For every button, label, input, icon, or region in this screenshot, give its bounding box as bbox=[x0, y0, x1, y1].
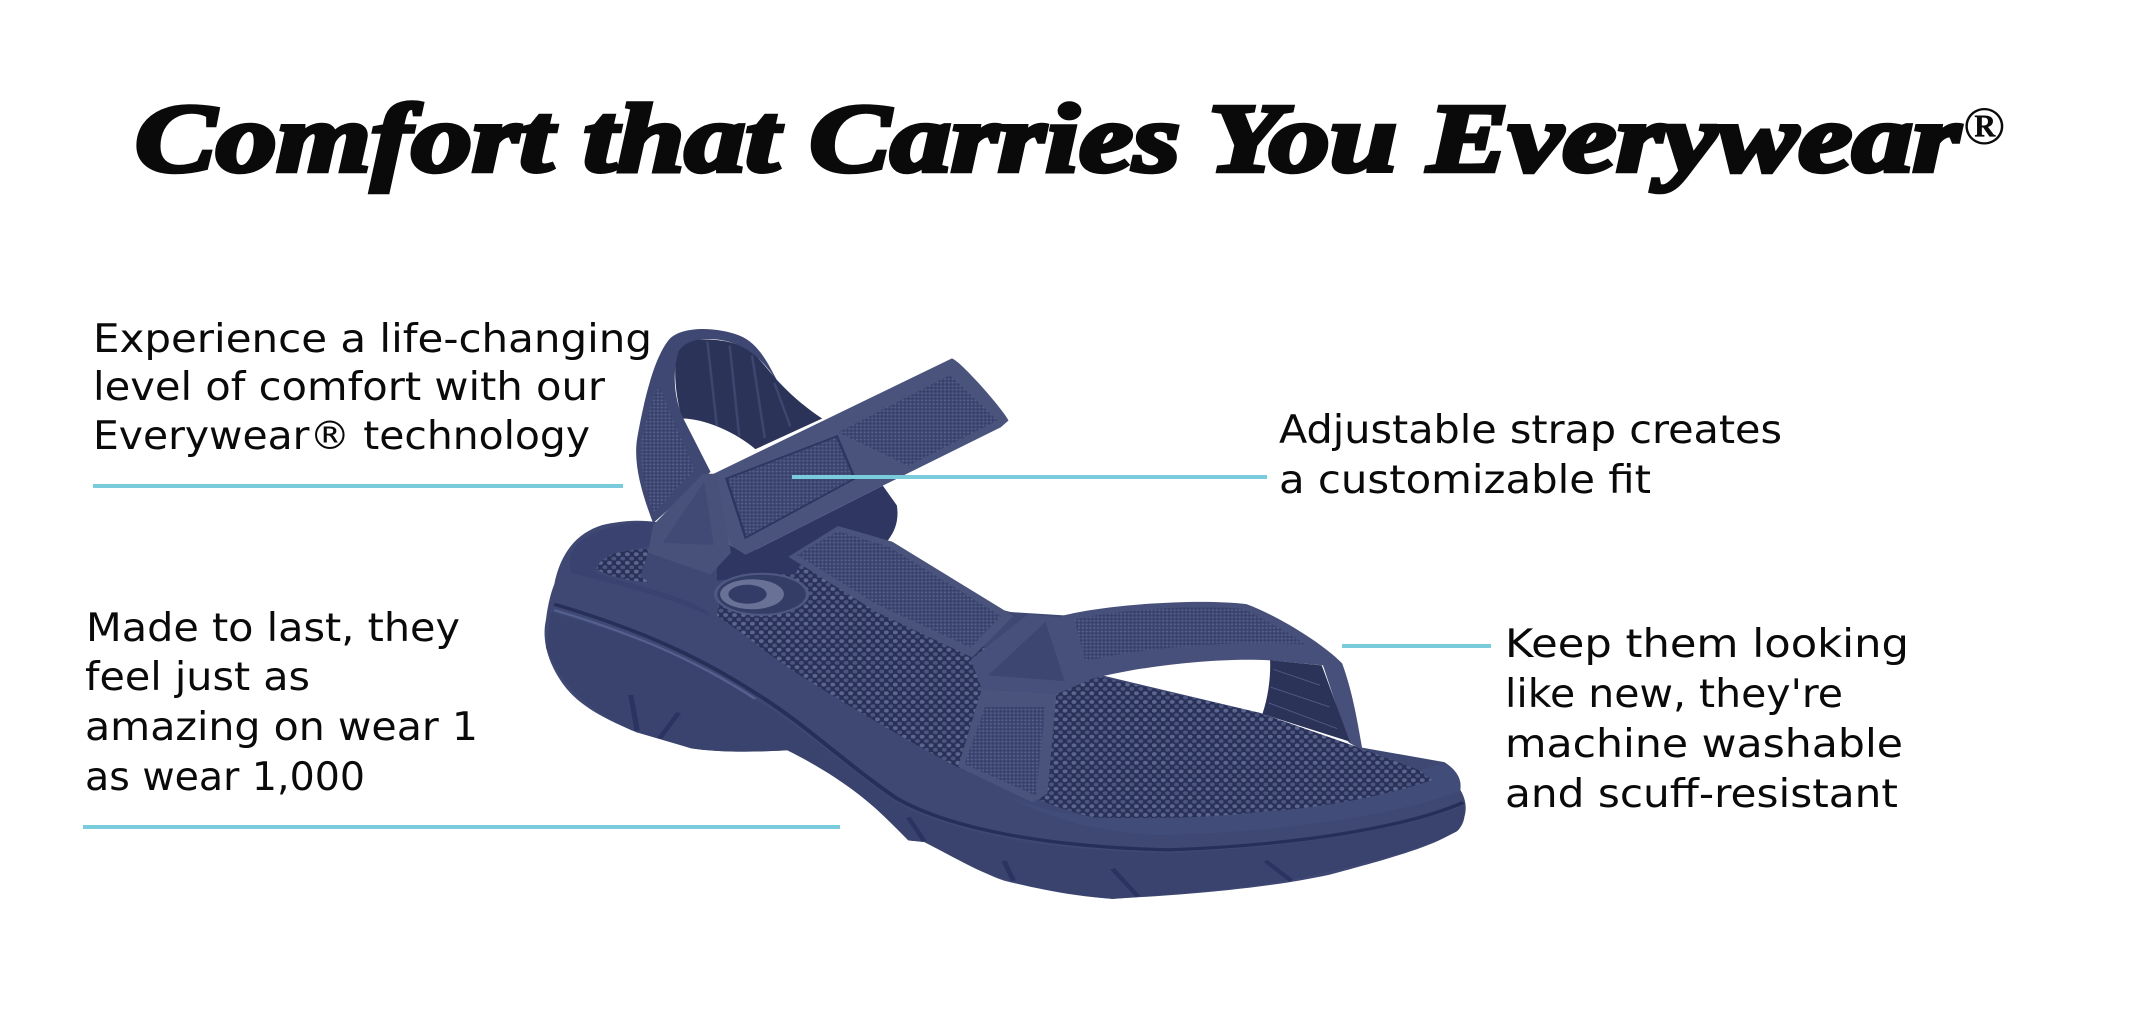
lower strap bbox=[958, 689, 1056, 802]
text: machine washable: Keep them looking bbox=[1505, 622, 1909, 667]
callout: everywear technology bbox=[93, 317, 652, 488]
velcro patch bbox=[726, 436, 855, 538]
title: ® bbox=[1963, 96, 2005, 156]
text: made to last: amazing on wear 1 bbox=[85, 705, 478, 750]
toe strap bbox=[1061, 602, 1363, 750]
text: machine washable bbox=[1505, 622, 1909, 817]
title: Comfort that Carries You Everywear bbox=[135, 85, 1961, 193]
sandal illustration bbox=[545, 329, 1466, 899]
text: made to last: feel just as bbox=[85, 655, 310, 700]
leader line bbox=[792, 475, 1267, 479]
front buckle triangle bbox=[971, 614, 1091, 694]
sole silhouette bbox=[545, 521, 1466, 899]
shaded area under velcro strap bbox=[717, 486, 897, 580]
toe front rim bbox=[1010, 763, 1461, 835]
rim line bbox=[554, 604, 1463, 850]
text: made to last: as wear 1,000 bbox=[85, 755, 365, 800]
velcro strap bbox=[714, 358, 1008, 555]
sole treads bbox=[631, 695, 1291, 896]
back heel strap bbox=[636, 329, 781, 523]
heel cup rim bbox=[570, 522, 711, 616]
text: everywear technology: level of comfort with our bbox=[93, 365, 606, 410]
text: everywear technology: Experience a life-changing bbox=[93, 317, 652, 362]
middle strap bbox=[788, 526, 1014, 657]
text: machine washable: like new, they're bbox=[1505, 672, 1843, 717]
rear buckle triangle bbox=[648, 474, 731, 575]
text: made to last bbox=[85, 606, 478, 800]
callout: machine washable bbox=[1342, 622, 1909, 817]
text: adjustable strap: a customizable fit bbox=[1279, 458, 1651, 503]
leader line bbox=[93, 484, 623, 488]
interior ribs bbox=[707, 341, 790, 438]
heel cup inner bbox=[596, 549, 650, 582]
text: made to last: Made to last, they bbox=[86, 606, 460, 651]
logo medallion bbox=[716, 574, 808, 615]
text: machine washable: machine washable bbox=[1505, 722, 1903, 767]
text: adjustable strap: Adjustable strap creates bbox=[1279, 408, 1782, 453]
white heel opening bbox=[684, 419, 756, 471]
leader line bbox=[1342, 644, 1491, 648]
far side of back strap interior bbox=[675, 339, 822, 449]
footbed bbox=[717, 557, 1433, 818]
leader line bbox=[83, 825, 840, 829]
text: adjustable strap bbox=[1279, 408, 1782, 503]
text: machine washable: and scuff-resistant bbox=[1505, 772, 1898, 817]
toe strap interior bbox=[1262, 660, 1350, 742]
text: everywear technology: Everywear® technology bbox=[93, 414, 590, 459]
text: everywear technology bbox=[93, 317, 652, 459]
sole lower shade bbox=[546, 612, 1465, 899]
callout: adjustable strap bbox=[792, 408, 1782, 503]
callout: made to last bbox=[83, 606, 840, 829]
